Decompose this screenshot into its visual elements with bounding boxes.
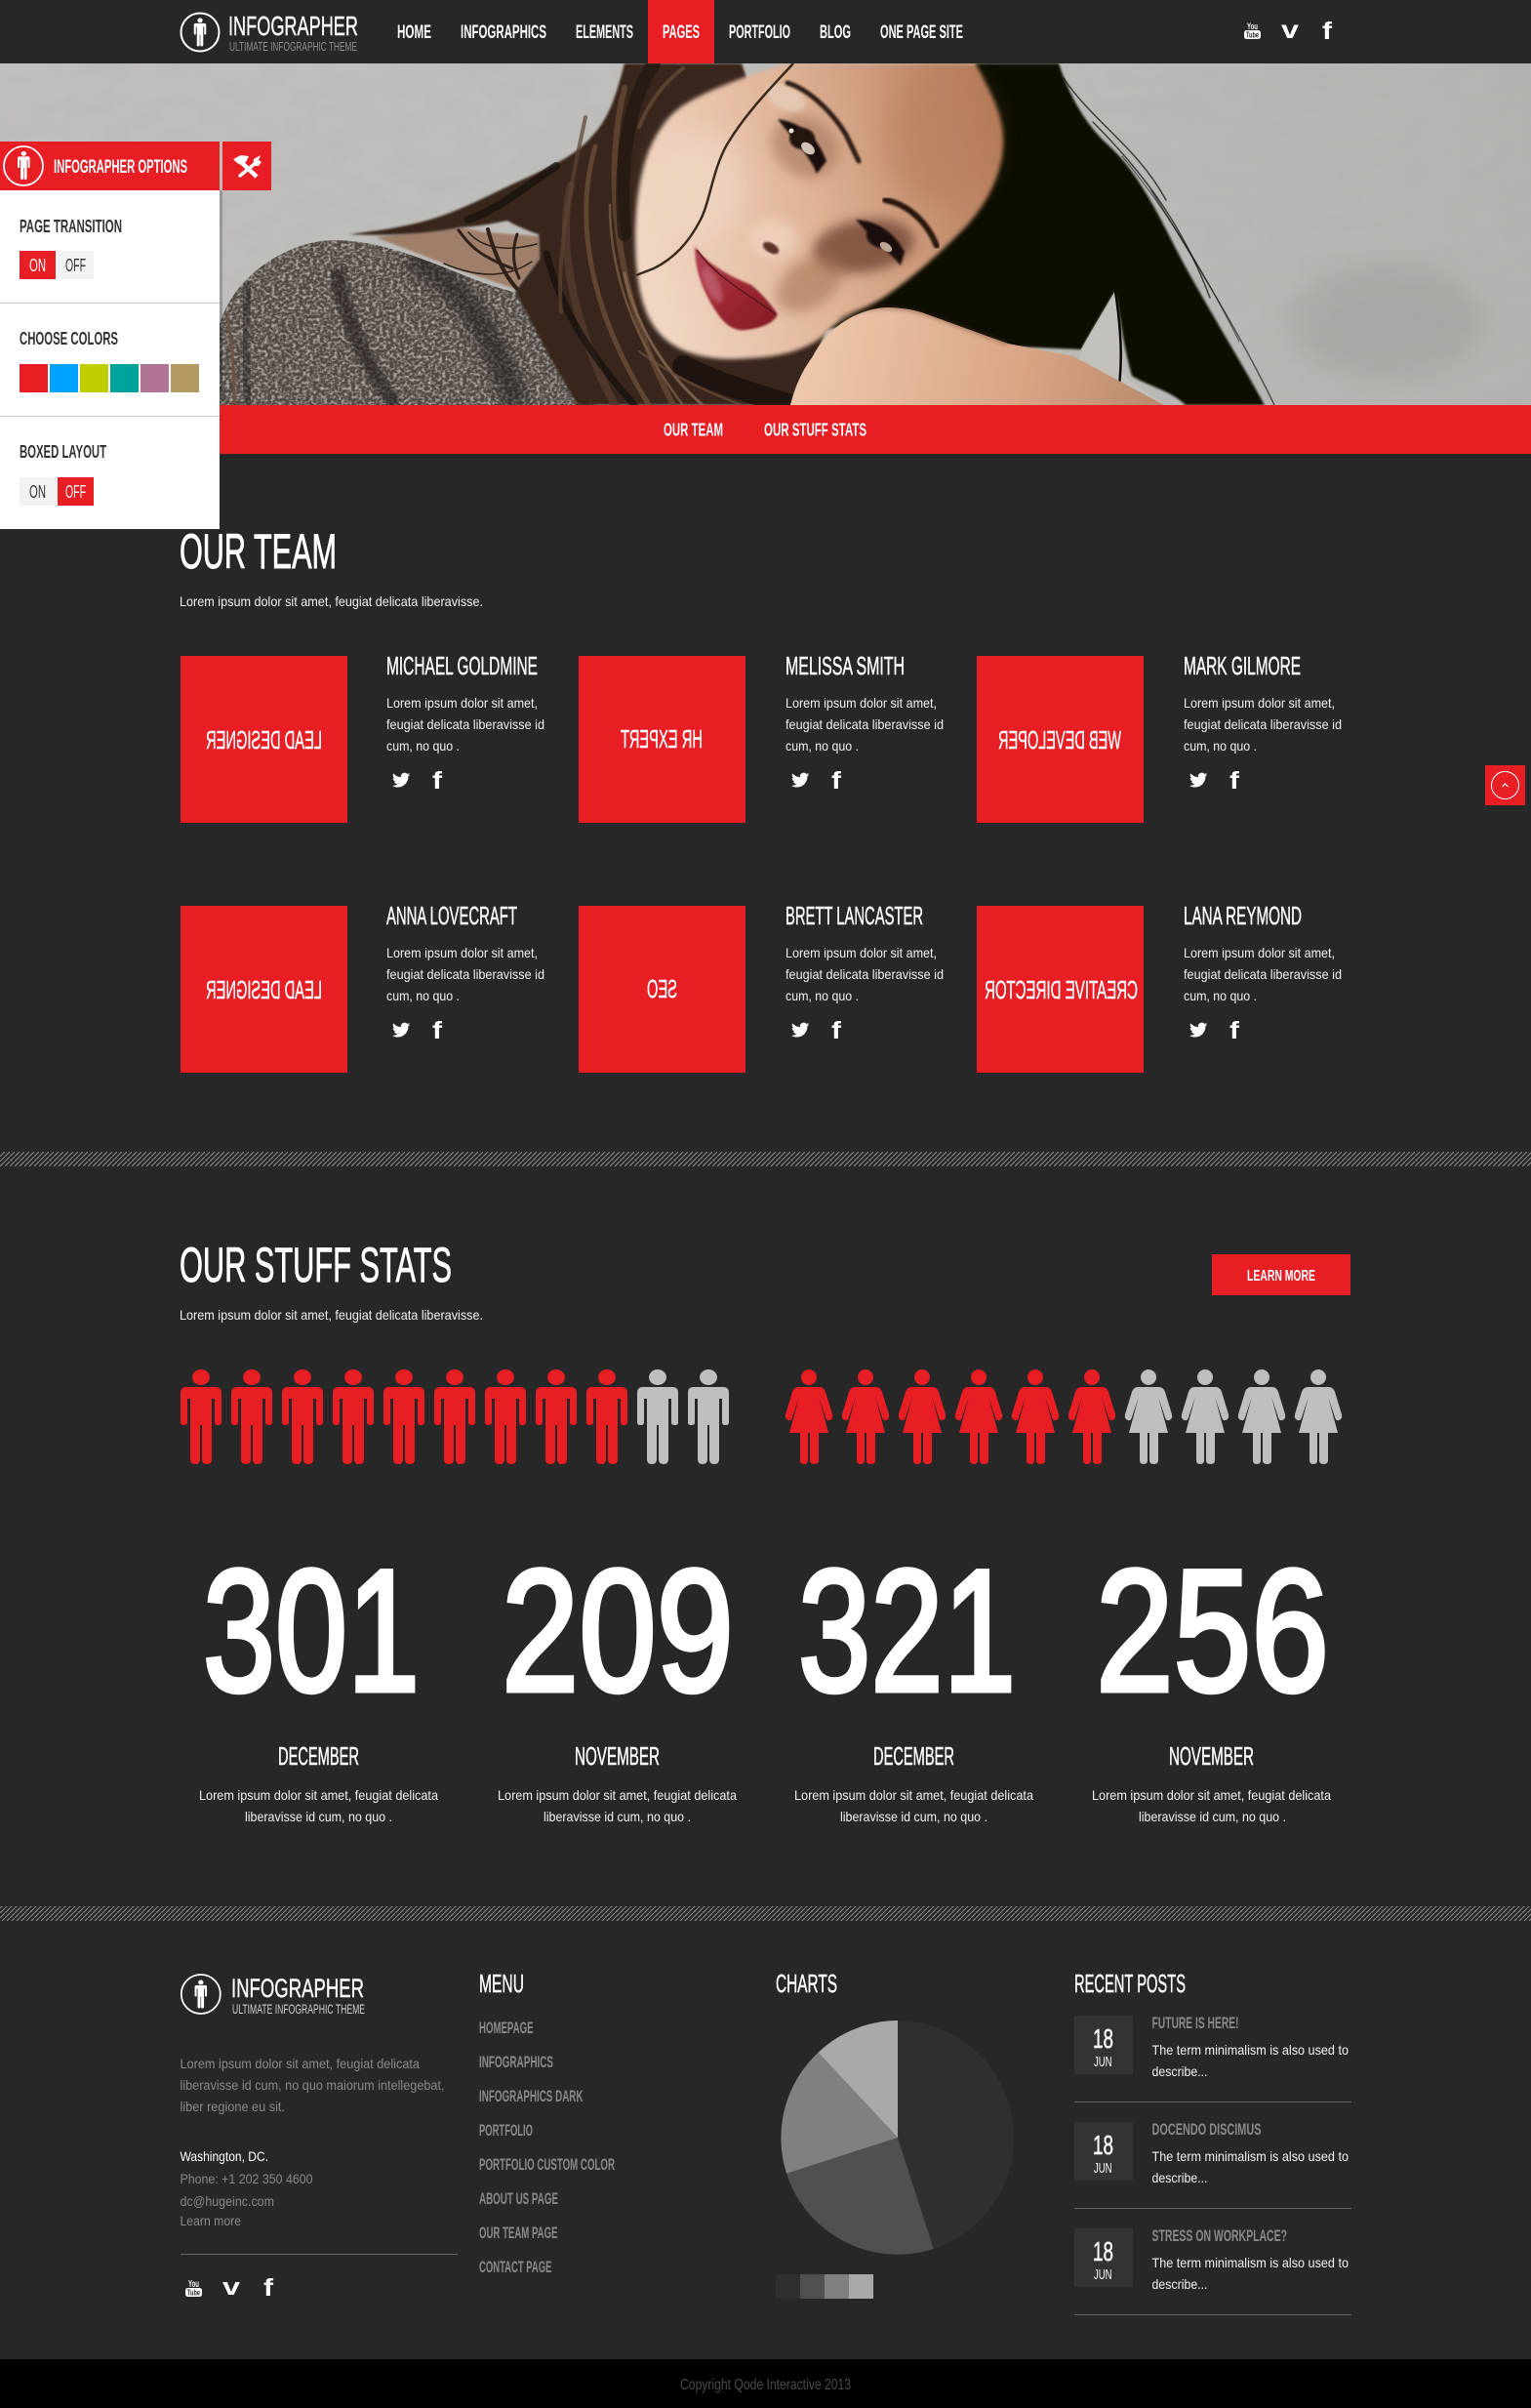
team member: Brett Lancaster: cum, no quo . (786, 988, 859, 1003)
team member: Brett Lancaster: feugiat delicata liberavisse id (786, 966, 944, 982)
stat: 256 November (1092, 1533, 1331, 1824)
option: page transition (20, 217, 122, 279)
post: stress on workplace: describe... (1151, 2276, 1208, 2292)
chart legend (776, 2274, 873, 2299)
footer column: menu (479, 1969, 615, 2276)
learn more button (1212, 1254, 1350, 1295)
post: docendo discimus: DOCENDO DISCIMUS (1151, 2120, 1261, 2139)
team member: Michael Goldmine: LEAD DESIGNER (206, 725, 322, 755)
options panel header (0, 142, 220, 190)
stat: 321 December: Lorem ipsum dolor sit amet, feugiat delicata (794, 1787, 1033, 1803)
header social icons: v (1281, 17, 1299, 44)
stat: 256 November: liberavisse id cum, no quo . (1139, 1809, 1286, 1824)
options panel header: INFOGRAPHER OPTIONS (54, 157, 187, 178)
team member: Lana Reymond (977, 901, 1342, 1073)
option: page transition: OFF (65, 256, 86, 275)
post: future is here: The term minimalism is also used to (1151, 2042, 1349, 2058)
option: boxed layout: OFF (65, 482, 86, 502)
team member: Anna Lovecraft: feugiat delicata liberavisse id (386, 966, 544, 982)
footer column: about: dc@hugeinc.com (180, 2193, 274, 2209)
icon: tools toggle (222, 142, 271, 190)
stat: 301 December: Lorem ipsum dolor sit amet, feugiat delicata (199, 1787, 438, 1803)
pictogram: men 9 of 11 (181, 1369, 729, 1464)
team member: Mark Gilmore (977, 651, 1342, 823)
red section navigation bar: OUR STUFF STATS (764, 420, 866, 439)
footer social icons: f (263, 2274, 274, 2302)
team member: Brett Lancaster: SEO (647, 974, 677, 1003)
stat: 321 December (794, 1533, 1033, 1824)
stat: 301 December: liberavisse id cum, no quo . (245, 1809, 392, 1824)
post: future is here: 18 (1093, 2023, 1113, 2054)
footer column: menu: ABOUT US PAGE (479, 2190, 558, 2208)
heading: our team (180, 524, 483, 609)
copyright bar (0, 2359, 1531, 2408)
team member: Anna Lovecraft: Lorem ipsum dolor sit amet, (386, 945, 538, 960)
stat: 209 November (498, 1533, 737, 1824)
team member: Melissa Smith: HR EXPERT (621, 724, 703, 754)
post: stress on workplace: The term minimalism is also used to (1151, 2255, 1349, 2270)
header social icons: Tube (1246, 31, 1259, 39)
footer column: recent posts (1074, 1969, 1351, 2315)
option: page transition: ON (29, 256, 46, 275)
team member: Michael Goldmine: Lorem ipsum dolor sit amet, (386, 695, 538, 711)
stat: 256 November: Lorem ipsum dolor sit amet, feugiat delicata (1092, 1787, 1331, 1803)
team member: Michael Goldmine: MICHAEL GOLDMINE (386, 651, 538, 680)
team member: Melissa Smith: feugiat delicata liberavisse id (786, 716, 944, 732)
header social icons: You (1247, 21, 1258, 31)
team member: Melissa Smith: cum, no quo . (786, 738, 859, 754)
footer social icons: Tube (187, 2288, 200, 2298)
footer column: about (180, 1974, 458, 2302)
team member: Mark Gilmore: f (1229, 767, 1240, 795)
navigation menu: PORTFOLIO (729, 22, 790, 43)
right hair feathering (1064, 78, 1274, 405)
team member: Melissa Smith: f (831, 767, 842, 795)
option: boxed layout (20, 442, 106, 506)
heading: our team: Lorem ipsum dolor sit amet, feugiat delicata liberavisse. (180, 593, 483, 609)
option: boxed layout: ON (29, 482, 46, 502)
stat: 209 November: Lorem ipsum dolor sit amet, feugiat delicata (498, 1787, 737, 1803)
heading: our team: OUR TEAM (180, 524, 337, 579)
footer column: charts (776, 1969, 1014, 2299)
copyright bar: Copyright Qode Interactive 2013 (680, 2377, 851, 2393)
footer column: about: liberavisse id cum, no quo maiorum intellegebat, (180, 2077, 445, 2093)
footer logo: ULTIMATE INFOGRAPHIC THEME (232, 2001, 365, 2017)
navigation menu: HOME (397, 22, 431, 43)
team member: Mark Gilmore: MARK GILMORE (1184, 651, 1301, 680)
navigation menu: ELEMENTS (576, 22, 633, 43)
post: future is here: FUTURE IS HERE! (1151, 2014, 1239, 2032)
team member: Melissa Smith: Lorem ipsum dolor sit amet, (786, 695, 937, 711)
team member: Anna Lovecraft (181, 901, 544, 1073)
team member: Lana Reymond: cum, no quo . (1184, 988, 1257, 1003)
post: future is here: describe... (1151, 2063, 1208, 2079)
footer column: menu: MENU (479, 1969, 524, 1998)
footer social icons: You (188, 2279, 199, 2290)
team member: Melissa Smith: MELISSA SMITH (786, 651, 905, 680)
footer column: menu: CONTACT PAGE (479, 2259, 552, 2276)
logo: person icon and wordmark (181, 11, 358, 54)
post: stress on workplace (1074, 2226, 1351, 2315)
heading: our stuff stats: Lorem ipsum dolor sit amet, feugiat delicata liberavisse. (180, 1307, 483, 1323)
learn more button: LEARN MORE (1247, 1268, 1315, 1285)
team member: Lana Reymond: f (1229, 1017, 1240, 1044)
heading: our stuff stats: OUR STUFF STATS (180, 1238, 452, 1292)
team member: Lana Reymond: feugiat delicata liberavisse id (1184, 966, 1342, 982)
stat: 209 November: NOVEMBER (575, 1741, 660, 1771)
footer column: menu: HOMEPAGE (479, 2020, 533, 2037)
stat: 321 December: liberavisse id cum, no quo . (840, 1809, 987, 1824)
post: stress on workplace: 18 (1093, 2236, 1113, 2266)
option: boxed layout: BOXED LAYOUT (20, 442, 106, 462)
post: docendo discimus: JUN (1094, 2160, 1112, 2177)
team member: Mark Gilmore: WEB DEVELOPER (998, 725, 1121, 755)
pie chart (781, 2020, 1014, 2255)
footer column: menu: INFOGRAPHICS DARK (479, 2088, 584, 2105)
team member: Michael Goldmine: cum, no quo . (386, 738, 460, 754)
stat: 301 December (199, 1533, 438, 1824)
red section navigation bar (220, 405, 1531, 454)
team member: Michael Goldmine: f (432, 767, 443, 795)
post: docendo discimus: The term minimalism is also used to (1151, 2148, 1349, 2164)
team member: Mark Gilmore: feugiat delicata liberavisse id (1184, 716, 1342, 732)
footer logo (181, 1974, 365, 2017)
team member: Mark Gilmore: Lorem ipsum dolor sit amet, (1184, 695, 1335, 711)
post: stress on workplace: STRESS ON WORKPLACE? (1151, 2226, 1287, 2245)
stat: 256 November: NOVEMBER (1169, 1741, 1254, 1771)
navigation menu (397, 22, 963, 43)
team member: Anna Lovecraft: ANNA LOVECRAFT (386, 901, 517, 930)
option: page transition: PAGE TRANSITION (20, 217, 122, 236)
team member: Brett Lancaster: Lorem ipsum dolor sit amet, (786, 945, 937, 960)
team member: Melissa Smith (579, 651, 944, 823)
footer logo: INFOGRAPHER (231, 1974, 364, 2003)
active nav highlight (648, 0, 714, 63)
team member: Mark Gilmore: cum, no quo . (1184, 738, 1257, 754)
footer column: about: Lorem ipsum dolor sit amet, feugiat delicata (180, 2056, 420, 2071)
pictogram: women 6 of 10 (786, 1369, 1342, 1464)
navigation menu: ONE PAGE SITE (880, 22, 963, 43)
logo: person icon and wordmark: ULTIMATE INFOGRAPHIC THEME (229, 39, 357, 54)
footer column: about: Washington, DC. (180, 2148, 268, 2164)
footer column: recent posts: RECENT POSTS (1074, 1969, 1186, 1998)
stat: 256 November: 256 (1096, 1533, 1329, 1728)
hair strands (468, 63, 790, 405)
footer column: about: liber regione eu sit. (180, 2099, 285, 2114)
team member: Brett Lancaster (579, 901, 944, 1073)
footer social icons (185, 2274, 274, 2302)
footer column: menu: PORTFOLIO CUSTOM COLOR (479, 2156, 615, 2174)
footer column: menu: INFOGRAPHICS (479, 2054, 553, 2071)
stat: 209 November: 209 (502, 1533, 734, 1728)
footer column: menu: PORTFOLIO (479, 2122, 533, 2140)
post: stress on workplace: JUN (1094, 2266, 1112, 2283)
stat: 209 November: liberavisse id cum, no quo . (544, 1809, 691, 1824)
heading: our stuff stats (180, 1238, 483, 1323)
team member: Anna Lovecraft: f (432, 1017, 443, 1044)
options panel (0, 142, 271, 529)
post: docendo discimus (1074, 2120, 1351, 2209)
header social icons: f (1322, 18, 1333, 45)
option: choose colors (20, 329, 199, 392)
header bar (0, 0, 1531, 63)
team member: Lana Reymond: Lorem ipsum dolor sit amet, (1184, 945, 1335, 960)
team member: Michael Goldmine: feugiat delicata liberavisse id (386, 716, 544, 732)
team member: Anna Lovecraft: cum, no quo . (386, 988, 460, 1003)
team member: Lana Reymond: LANA REYMOND (1184, 901, 1302, 930)
footer column: about: Learn more (180, 2213, 241, 2228)
stat: 321 December: DECEMBER (873, 1741, 954, 1771)
back to top button (1485, 765, 1525, 805)
footer social icons: v (222, 2274, 241, 2301)
hero photo: woman resting her head on her shoulder (0, 63, 1531, 410)
header social icons (1244, 17, 1333, 45)
post: future is here (1074, 2014, 1351, 2102)
post: future is here: JUN (1094, 2054, 1112, 2070)
stat: 301 December: DECEMBER (278, 1741, 359, 1771)
navigation menu: PAGES (663, 22, 700, 43)
post: docendo discimus: 18 (1093, 2130, 1113, 2160)
team member: Brett Lancaster: BRETT LANCASTER (786, 901, 923, 930)
option: choose colors: CHOOSE COLORS (20, 329, 118, 348)
team member: Anna Lovecraft: LEAD DESIGNER (206, 975, 322, 1004)
team member: Lana Reymond: CREATIVE DIRECTOR (985, 975, 1138, 1004)
logo: person icon and wordmark: INFOGRAPHER (228, 11, 358, 41)
stat: 301 December: 301 (203, 1533, 420, 1728)
panel body (0, 190, 220, 529)
team member: Michael Goldmine (181, 651, 544, 823)
stat: 321 December: 321 (798, 1533, 1016, 1728)
post: docendo discimus: describe... (1151, 2170, 1208, 2185)
footer column: menu: OUR TEAM PAGE (479, 2224, 558, 2242)
footer column: about: Phone: +1 202 350 4600 (180, 2171, 313, 2186)
navigation menu: INFOGRAPHICS (461, 22, 546, 43)
red section navigation bar: OUR TEAM (664, 420, 723, 439)
team member: Brett Lancaster: f (831, 1017, 842, 1044)
footer column: charts: CHARTS (776, 1969, 837, 1998)
navigation menu: BLOG (820, 22, 851, 43)
